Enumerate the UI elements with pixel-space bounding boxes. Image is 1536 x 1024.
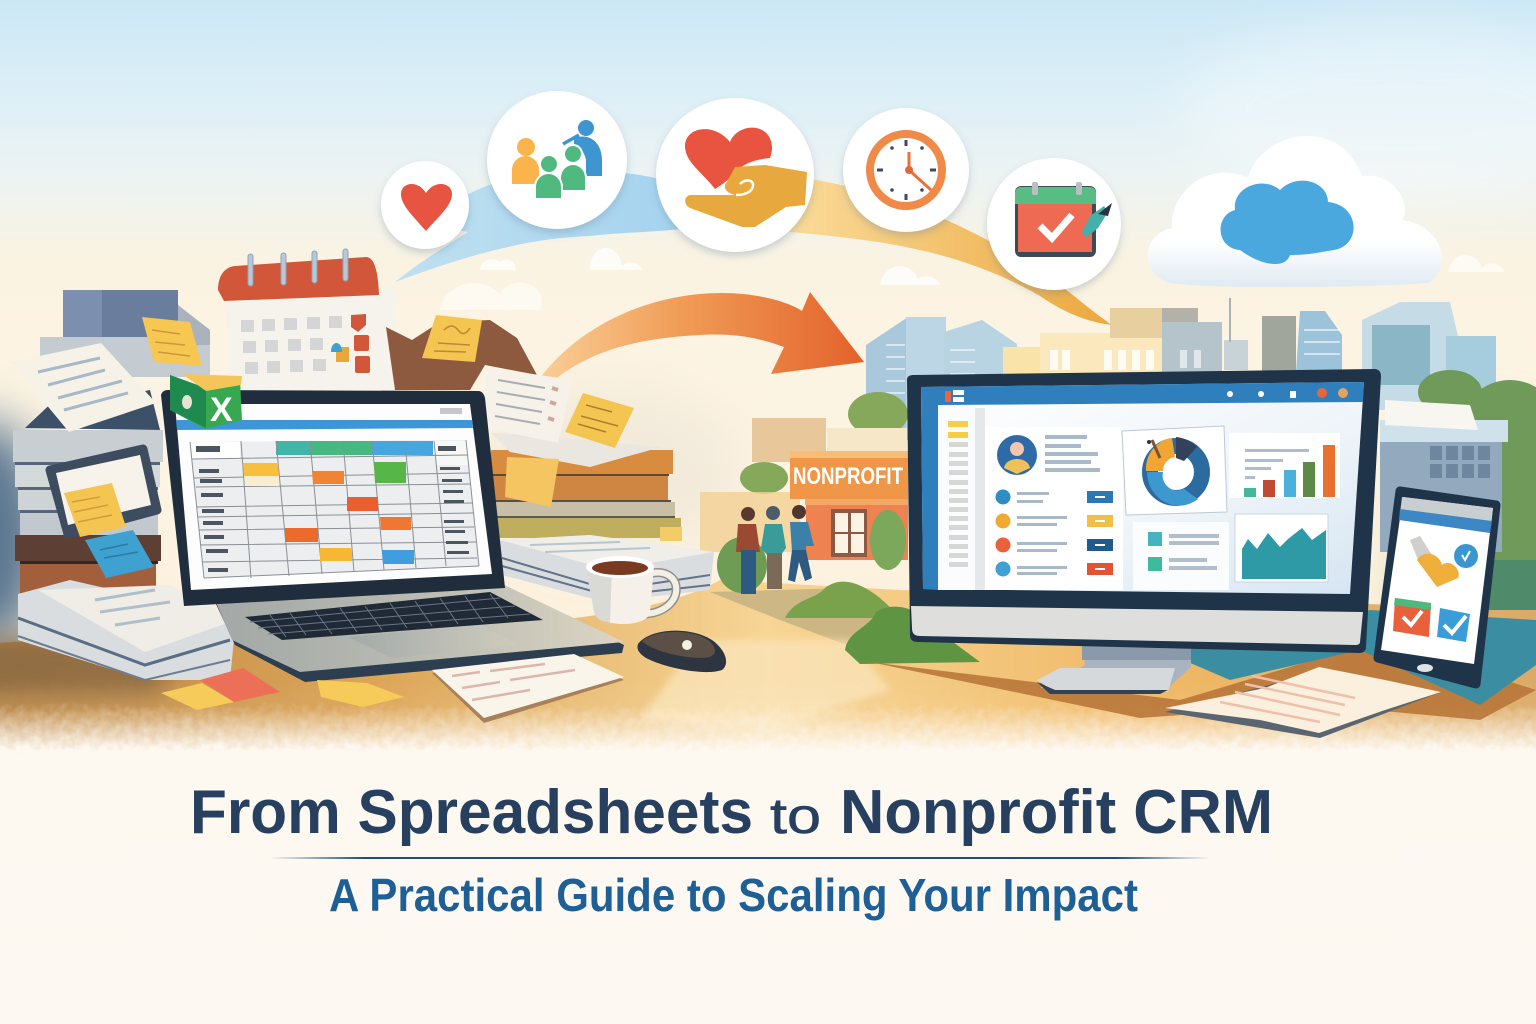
stand <box>1037 642 1191 694</box>
desk sticky notes <box>161 668 404 710</box>
left background buildings <box>40 290 210 377</box>
touchpad <box>348 625 518 658</box>
title rule <box>270 857 1210 859</box>
blue cloud icon <box>1221 181 1354 264</box>
table cells <box>243 462 414 564</box>
phone heart <box>1410 536 1478 587</box>
app bar <box>921 382 1364 590</box>
brown mat under monitor <box>870 640 1536 720</box>
paper <box>482 367 572 443</box>
desk paper <box>432 654 624 723</box>
sidebar <box>938 405 985 590</box>
title: From Spreadsheets <box>190 778 753 847</box>
tablet sticky <box>64 483 126 537</box>
bar chart panel <box>1229 433 1340 498</box>
large cloud <box>1148 136 1442 287</box>
sign text: NONPROFIT <box>793 463 903 490</box>
torn brown folder <box>386 315 537 390</box>
area chart panel <box>1235 514 1328 582</box>
list panel <box>1133 522 1229 590</box>
spreadsheet table <box>190 440 479 578</box>
keyboard <box>245 592 543 640</box>
icon circle: community people <box>487 91 627 229</box>
chin <box>911 606 1363 645</box>
yellow arc behind icons <box>780 175 1112 325</box>
icon circle: heart <box>381 161 469 249</box>
screen bezel <box>161 390 505 606</box>
orange and olive books <box>491 450 682 541</box>
phone calendar tile <box>1393 598 1431 637</box>
bushes <box>717 537 980 664</box>
computer mouse <box>637 631 726 672</box>
subtitle: A Practical Guide to Scaling Your Impact <box>329 869 1138 921</box>
yellow note <box>142 317 202 366</box>
title bar <box>176 420 473 430</box>
phone check tile <box>1437 608 1470 642</box>
small background clouds <box>440 248 1504 310</box>
blue arc behind icons <box>395 172 740 282</box>
right background skyline <box>866 298 1496 440</box>
title connector word: to <box>770 788 821 844</box>
donut chart panel <box>1122 426 1227 515</box>
right desk stack <box>482 367 714 602</box>
screen <box>921 382 1364 594</box>
brown books <box>15 535 161 594</box>
top white book <box>491 433 661 467</box>
left desk stack <box>11 317 236 680</box>
laptop <box>161 390 624 682</box>
excel icon <box>170 374 242 429</box>
screen <box>175 404 492 590</box>
row labels <box>196 446 469 572</box>
bottom white stack <box>18 580 236 680</box>
small tablet <box>50 449 157 534</box>
monitor <box>907 369 1381 694</box>
right office building <box>1380 400 1536 610</box>
contact panel <box>985 427 1123 590</box>
back trees <box>740 370 1536 600</box>
wall calendar <box>218 249 397 392</box>
blue sticky <box>85 530 154 578</box>
laptop base <box>215 585 624 682</box>
nonprofit building <box>700 418 908 570</box>
yellow note pinned <box>505 457 559 507</box>
yellow note <box>422 315 482 362</box>
smartphone <box>1378 491 1496 684</box>
icon circle: clock <box>843 108 969 232</box>
yellow note <box>565 393 634 448</box>
ground fade <box>0 680 1536 780</box>
title end: Nonprofit CRM <box>840 778 1273 847</box>
tilted paper <box>11 343 156 432</box>
lower white stack <box>500 535 714 602</box>
people walking <box>736 505 814 594</box>
open notebook <box>1165 667 1441 738</box>
big orange arrow <box>540 292 864 382</box>
coffee mug <box>586 556 676 624</box>
excel icon: X <box>210 391 233 429</box>
grey paper books <box>13 390 163 537</box>
icon circle: heart in hand <box>656 98 814 252</box>
background haze <box>0 20 1536 700</box>
teal surface right <box>1160 610 1536 705</box>
icon circle: calendar check <box>987 158 1121 290</box>
ground and desk <box>0 580 1536 750</box>
frame <box>907 369 1381 653</box>
